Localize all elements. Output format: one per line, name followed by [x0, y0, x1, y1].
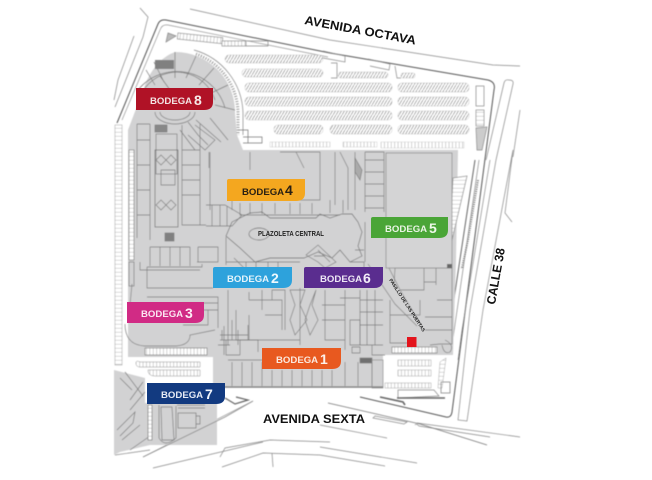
bodega 1 tag: 1	[320, 351, 328, 367]
bodega 5 tag: 5	[429, 220, 437, 236]
bodega 6 tag: 6	[363, 270, 371, 286]
bodega 6 tag	[304, 267, 383, 288]
bodega 2 tag: 2	[271, 270, 279, 286]
street label: Calle 38: CALLE 38	[484, 247, 508, 306]
bodega 3 tag: BODEGA	[141, 309, 183, 320]
top service strip	[166, 33, 268, 46]
building footprint	[128, 52, 458, 388]
bodega 1 tag: BODEGA	[276, 355, 318, 366]
bodega 4 tag	[227, 179, 305, 201]
block corner marker	[447, 264, 452, 268]
bodega 2 tag	[213, 267, 292, 288]
bodega 4 tag: BODEGA	[242, 187, 284, 198]
bodega 2 tag: BODEGA	[227, 274, 269, 285]
street label: Avenida Sexta: AVENIDA SEXTA	[263, 412, 365, 426]
bodega 1 tag	[262, 348, 341, 369]
parking rows	[225, 55, 469, 148]
label: Pasillo de las Puertas: PASILLO DE LAS PUERTAS	[387, 278, 427, 334]
rotunda dark service block	[155, 60, 174, 69]
bodega 3 tag	[127, 302, 204, 323]
roads and site boundary	[114, 8, 520, 468]
east parking margin details	[323, 51, 487, 268]
bodega 6 tag: BODEGA	[320, 274, 362, 285]
bodega 7 tag: 7	[205, 386, 213, 402]
bodega 5 tag: BODEGA	[385, 224, 427, 235]
bodega 8 tag	[136, 88, 213, 110]
loading dock marks	[225, 397, 445, 405]
west car park	[136, 361, 200, 376]
bodega 8 tag: 8	[194, 92, 202, 108]
street label: Avenida Octava: AVENIDA OCTAVA	[303, 13, 417, 48]
bodega 7 tag: BODEGA	[161, 390, 203, 401]
lower left block	[114, 370, 217, 455]
diagonal road line across lower block	[143, 401, 253, 457]
base map	[114, 8, 520, 468]
interior floor plan lines	[125, 124, 452, 388]
label: Plazoleta Central: PLAZOLETA CENTRAL	[258, 231, 325, 238]
large anchor block	[386, 153, 452, 268]
bodega 8 tag: BODEGA	[150, 96, 192, 107]
bodega 5 tag	[371, 217, 448, 238]
red location marker	[407, 337, 416, 347]
bodega 3 tag: 3	[185, 305, 193, 321]
lower left lot details	[117, 372, 205, 450]
rotunda detail	[138, 50, 262, 150]
bodega 7 tag	[147, 383, 225, 404]
south car park	[385, 358, 450, 398]
bodega 4 tag: 4	[285, 182, 293, 198]
west stall column	[115, 125, 122, 365]
